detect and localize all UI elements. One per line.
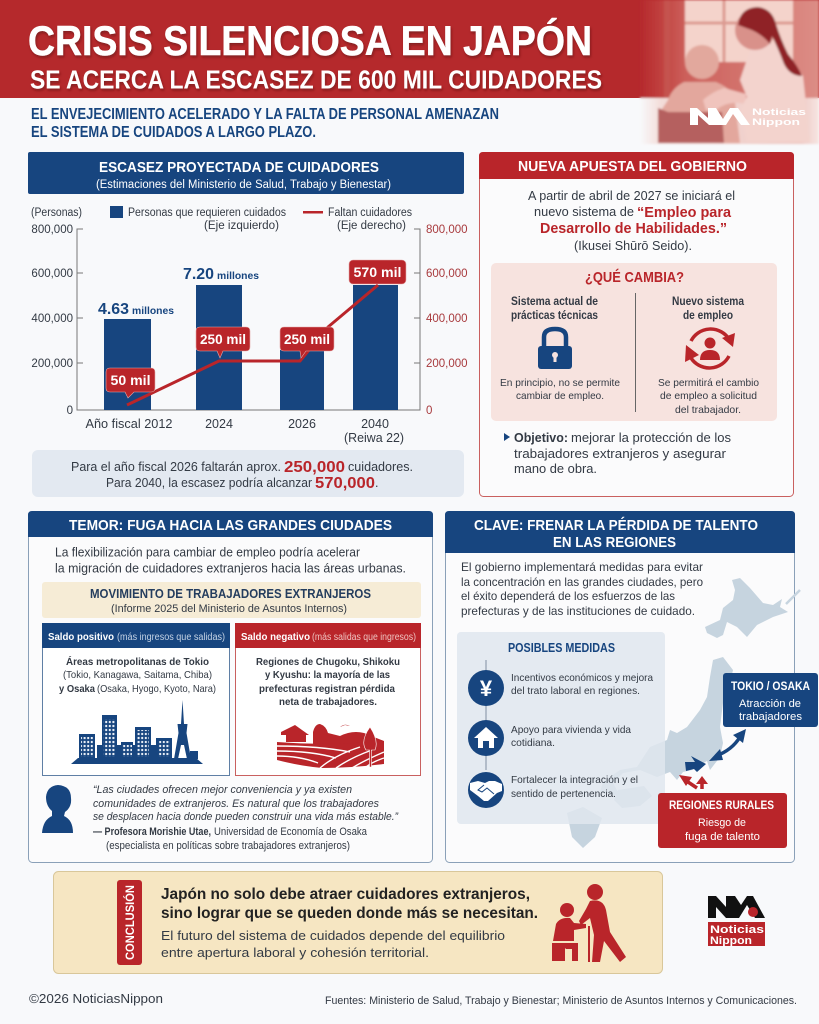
panel heading: EN LAS REGIONES (553, 534, 676, 551)
callout: Tokyo / Osaka: Atracción de (739, 698, 801, 710)
intro text (55, 546, 406, 576)
chart summary: cuidadores. (348, 460, 413, 474)
value labels: 4.63 (98, 301, 129, 318)
left axis labels: 0 (67, 405, 73, 417)
x axis labels: (Reiwa 22) (344, 431, 404, 445)
intro text: el éxito dependerá de los esfuerzos de las (461, 589, 675, 603)
programme description: Desarrollo de Habilidades.” (540, 221, 727, 237)
icon: rural landscape (277, 724, 384, 768)
conclusion tag (117, 880, 142, 965)
chart legend: (Eje izquierdo) (204, 220, 279, 232)
conclusion (54, 872, 662, 974)
current system: prácticas técnicas (511, 310, 598, 322)
objective: mano de obra. (514, 461, 597, 476)
programme description: A partir de abril de 2027 se iniciará el (528, 188, 735, 203)
conclusion text: sino lograr que se queden donde más se necesitan. (161, 905, 538, 922)
logo (708, 896, 765, 947)
header photo: nurse and elderly person (640, 0, 819, 144)
possible measures box: del trato laboral en regiones. (511, 685, 640, 697)
positive balance card: Áreas metropolitanas de Tokio (66, 655, 209, 668)
negative balance card: neta de trabajadores. (279, 696, 377, 708)
intro text: El gobierno implementará medidas para evitar (461, 560, 703, 574)
callouts: 250 mil (284, 331, 330, 347)
chart legend: (Eje derecho) (337, 220, 406, 232)
new system: Nuevo sistema (672, 296, 745, 308)
programme description: (Ikusei Shūrō Seido). (574, 238, 692, 253)
right axis labels: 600,000 (426, 268, 468, 280)
negative balance card (235, 623, 421, 776)
value labels: millones (217, 270, 259, 282)
callout: Tokyo / Osaka: trabajadores (739, 711, 803, 723)
left axis labels: 800,000 (31, 224, 73, 236)
movement heading (42, 582, 421, 618)
objective: Objetivo: (514, 430, 568, 445)
panel: government bet (479, 152, 794, 496)
shortage line (127, 285, 378, 405)
left axis labels: 600,000 (31, 268, 73, 280)
intro text: La flexibilización para cambiar de empleo podría acelerar (55, 546, 360, 560)
possible measures box: cotidiana. (511, 737, 555, 749)
x axis labels: 2024 (205, 417, 233, 431)
title: CRISIS SILENCIOSA EN JAPÓN (28, 16, 592, 64)
chart heading: (Estimaciones del Ministerio de Salud, Trabajo y Bienestar) (96, 179, 391, 191)
possible measures box: sentido de pertenencia. (511, 788, 616, 800)
callout: rural regions: REGIONES RURALES (669, 798, 774, 812)
header logo (690, 107, 806, 127)
quote: — Profesora Morishie Utae, (93, 826, 211, 838)
value labels: 7.20 (183, 266, 214, 283)
right axis labels: 800,000 (426, 224, 468, 236)
programme description: nuevo sistema de (534, 204, 634, 219)
icon: caregiver helping elder (552, 884, 626, 962)
chart summary: . (375, 476, 378, 490)
x axis labels: 2040 (361, 417, 389, 431)
current system: Sistema actual de (511, 296, 598, 308)
positive balance card: (Osaka, Hyogo, Kyoto, Nara) (97, 683, 216, 695)
new system: de empleo (683, 310, 733, 322)
quote: comunidades de extranjeros. Es natural que los trabajadores (93, 798, 379, 810)
callout: rural regions (658, 793, 787, 848)
movement heading: (Informe 2025 del Ministerio de Asuntos Internos) (111, 603, 347, 615)
quote: Universidad de Economía de Osaka (214, 826, 368, 838)
negative balance card: y Kyushu: la mayoría de las (265, 669, 390, 681)
negative balance card: Regiones de Chugoku, Shikoku (256, 656, 400, 668)
positive balance card: Saldo positivo (48, 631, 114, 643)
map of Japan (567, 578, 800, 848)
panel heading (28, 511, 433, 537)
right axis labels: 200,000 (426, 358, 468, 370)
logo: Noticias (710, 924, 764, 936)
objective: trabajadores extranjeros y asegurar (514, 446, 727, 461)
chart heading (28, 152, 464, 194)
chart legend: Faltan cuidadores (328, 207, 412, 219)
left axis labels: 400,000 (31, 313, 73, 325)
header banner (0, 0, 819, 144)
new system: de empleo a solicitud (660, 390, 757, 402)
movement heading: MOVIMIENTO DE TRABAJADORES EXTRANJEROS (90, 587, 371, 601)
chart summary: Para 2040, la escasez podría alcanzar (106, 476, 312, 490)
right axis labels: 0 (426, 405, 432, 417)
panel heading: NUEVA APUESTA DEL GOBIERNO (518, 158, 747, 175)
chart legend: Personas que requieren cuidados (128, 207, 286, 219)
panel heading: TEMOR: FUGA HACIA LAS GRANDES CIUDADES (69, 517, 392, 534)
icon: city skyline (71, 700, 203, 764)
possible measures box: Incentivos económicos y mejora (511, 672, 653, 684)
intro text: la migración de cuidadores extranjeros hacia las áreas urbanas. (55, 562, 406, 576)
icon: padlock (538, 329, 572, 369)
x axis labels: Año fiscal 2012 (86, 417, 173, 431)
panel heading (445, 511, 795, 553)
left axis labels: 200,000 (31, 358, 73, 370)
new system: del trabajador. (675, 404, 741, 416)
what changes box: ¿QUÉ CAMBIA? (585, 269, 684, 286)
programme description: “Empleo para (637, 205, 732, 221)
quote: se desplacen hacia donde pueden construir una vida más estable.” (93, 811, 399, 823)
current system: cambiar de empleo. (516, 390, 604, 402)
title: SE ACERCA LA ESCASEZ DE 600 MIL CUIDADORES (30, 64, 602, 94)
icon: yen: ¥ (480, 676, 493, 701)
positive balance card: (más ingresos que salidas) (117, 632, 225, 643)
objective: mejorar la protección de los (571, 430, 731, 445)
x axis labels: 2026 (288, 417, 316, 431)
negative balance card: prefecturas registran pérdida (259, 683, 395, 695)
callout: rural regions: Riesgo de (698, 817, 746, 829)
callouts: 50 mil (110, 372, 150, 388)
negative balance card: (más salidas que ingresos) (312, 632, 416, 643)
chart summary: 570,000 (315, 475, 375, 492)
panel heading: CLAVE: FRENAR LA PÉRDIDA DE TALENTO (474, 517, 758, 534)
icon: house (468, 720, 504, 756)
subtitle: EL SISTEMA DE CUIDADOS A LARGO PLAZO. (31, 124, 316, 141)
new system (658, 296, 759, 416)
callouts: 570 mil (354, 264, 402, 280)
right axis labels: 400,000 (426, 313, 468, 325)
possible measures box: Apoyo para vivienda y vida (511, 724, 631, 736)
possible measures box: POSIBLES MEDIDAS (508, 641, 615, 655)
callout: rural regions: fuga de talento (685, 831, 760, 843)
conclusion text: El futuro del sistema de cuidados depende del equilibrio (161, 928, 505, 943)
conclusion text: entre apertura laboral y cohesión territorial. (161, 945, 429, 960)
conclusion text: Japón no solo debe atraer cuidadores extranjeros, (161, 886, 530, 903)
bar and line chart (31, 224, 468, 445)
value labels (98, 266, 259, 318)
logo: Nippon (710, 935, 752, 947)
icon: handshake (468, 772, 504, 808)
callouts (106, 260, 406, 398)
objective (504, 430, 731, 476)
possible measures box: Fortalecer la integración y el (511, 774, 638, 786)
icon: job change arrows (685, 329, 735, 368)
quote (42, 784, 399, 852)
chart heading: ESCASEZ PROYECTADA DE CUIDADORES (99, 159, 379, 176)
chart summary: 250,000 (284, 459, 345, 476)
possible measures box (457, 632, 665, 824)
copyright: ©2026 NoticiasNippon (29, 991, 163, 1006)
conclusion text (161, 886, 538, 960)
current system: En principio, no se permite (500, 377, 620, 389)
panel: fear of flight to cities (28, 511, 433, 862)
negative balance card: Saldo negativo (241, 631, 310, 643)
positive balance card (42, 623, 230, 776)
current system (500, 296, 620, 402)
new system: Se permitirá el cambio (658, 377, 759, 389)
x axis labels (86, 417, 404, 445)
header logo: Noticias (752, 107, 806, 117)
chart legend: (Personas) (31, 207, 82, 219)
callout: Tokyo / Osaka (723, 673, 818, 727)
programme description (528, 188, 735, 253)
conclusion tag: CONCLUSIÓN (124, 885, 137, 960)
arrows: worker flow (679, 729, 746, 789)
title (28, 16, 602, 94)
subtitle: EL ENVEJECIMIENTO ACELERADO Y LA FALTA DE PERSONAL AMENAZAN (31, 106, 499, 123)
panel: shortage chart (28, 152, 468, 497)
positive balance card: (Tokio, Kanagawa, Saitama, Chiba) (63, 669, 212, 681)
right axis labels (426, 224, 468, 417)
callouts: 250 mil (200, 331, 246, 347)
chart summary: Para el año fiscal 2026 faltarán aprox. (71, 460, 281, 474)
value labels: millones (132, 305, 174, 317)
icon: yen (468, 670, 504, 706)
quote: (especialista en políticas sobre trabajadores extranjeros) (106, 840, 350, 852)
left axis labels (31, 224, 73, 417)
icon: professor silhouette (42, 785, 73, 833)
intro text: la concentración en las grandes ciudades, pero (461, 575, 703, 589)
intro text: prefecturas y de las instituciones de cuidado. (461, 604, 695, 618)
intro text (461, 560, 703, 618)
chart summary (32, 450, 464, 497)
panel heading (479, 152, 794, 179)
bars (104, 285, 398, 410)
chart legend (31, 206, 412, 232)
positive balance card: y Osaka (59, 683, 95, 695)
panel: key regional retention (445, 511, 818, 862)
quote: “Las ciudades ofrecen mejor conveniencia y ya existen (93, 784, 352, 796)
subtitle (31, 106, 499, 141)
what changes box (491, 263, 777, 421)
sources: Fuentes: Ministerio de Salud, Trabajo y Bienestar; Ministerio de Asuntos Internos y Comunicaciones. (325, 995, 797, 1007)
header logo: Nippon (752, 117, 800, 127)
